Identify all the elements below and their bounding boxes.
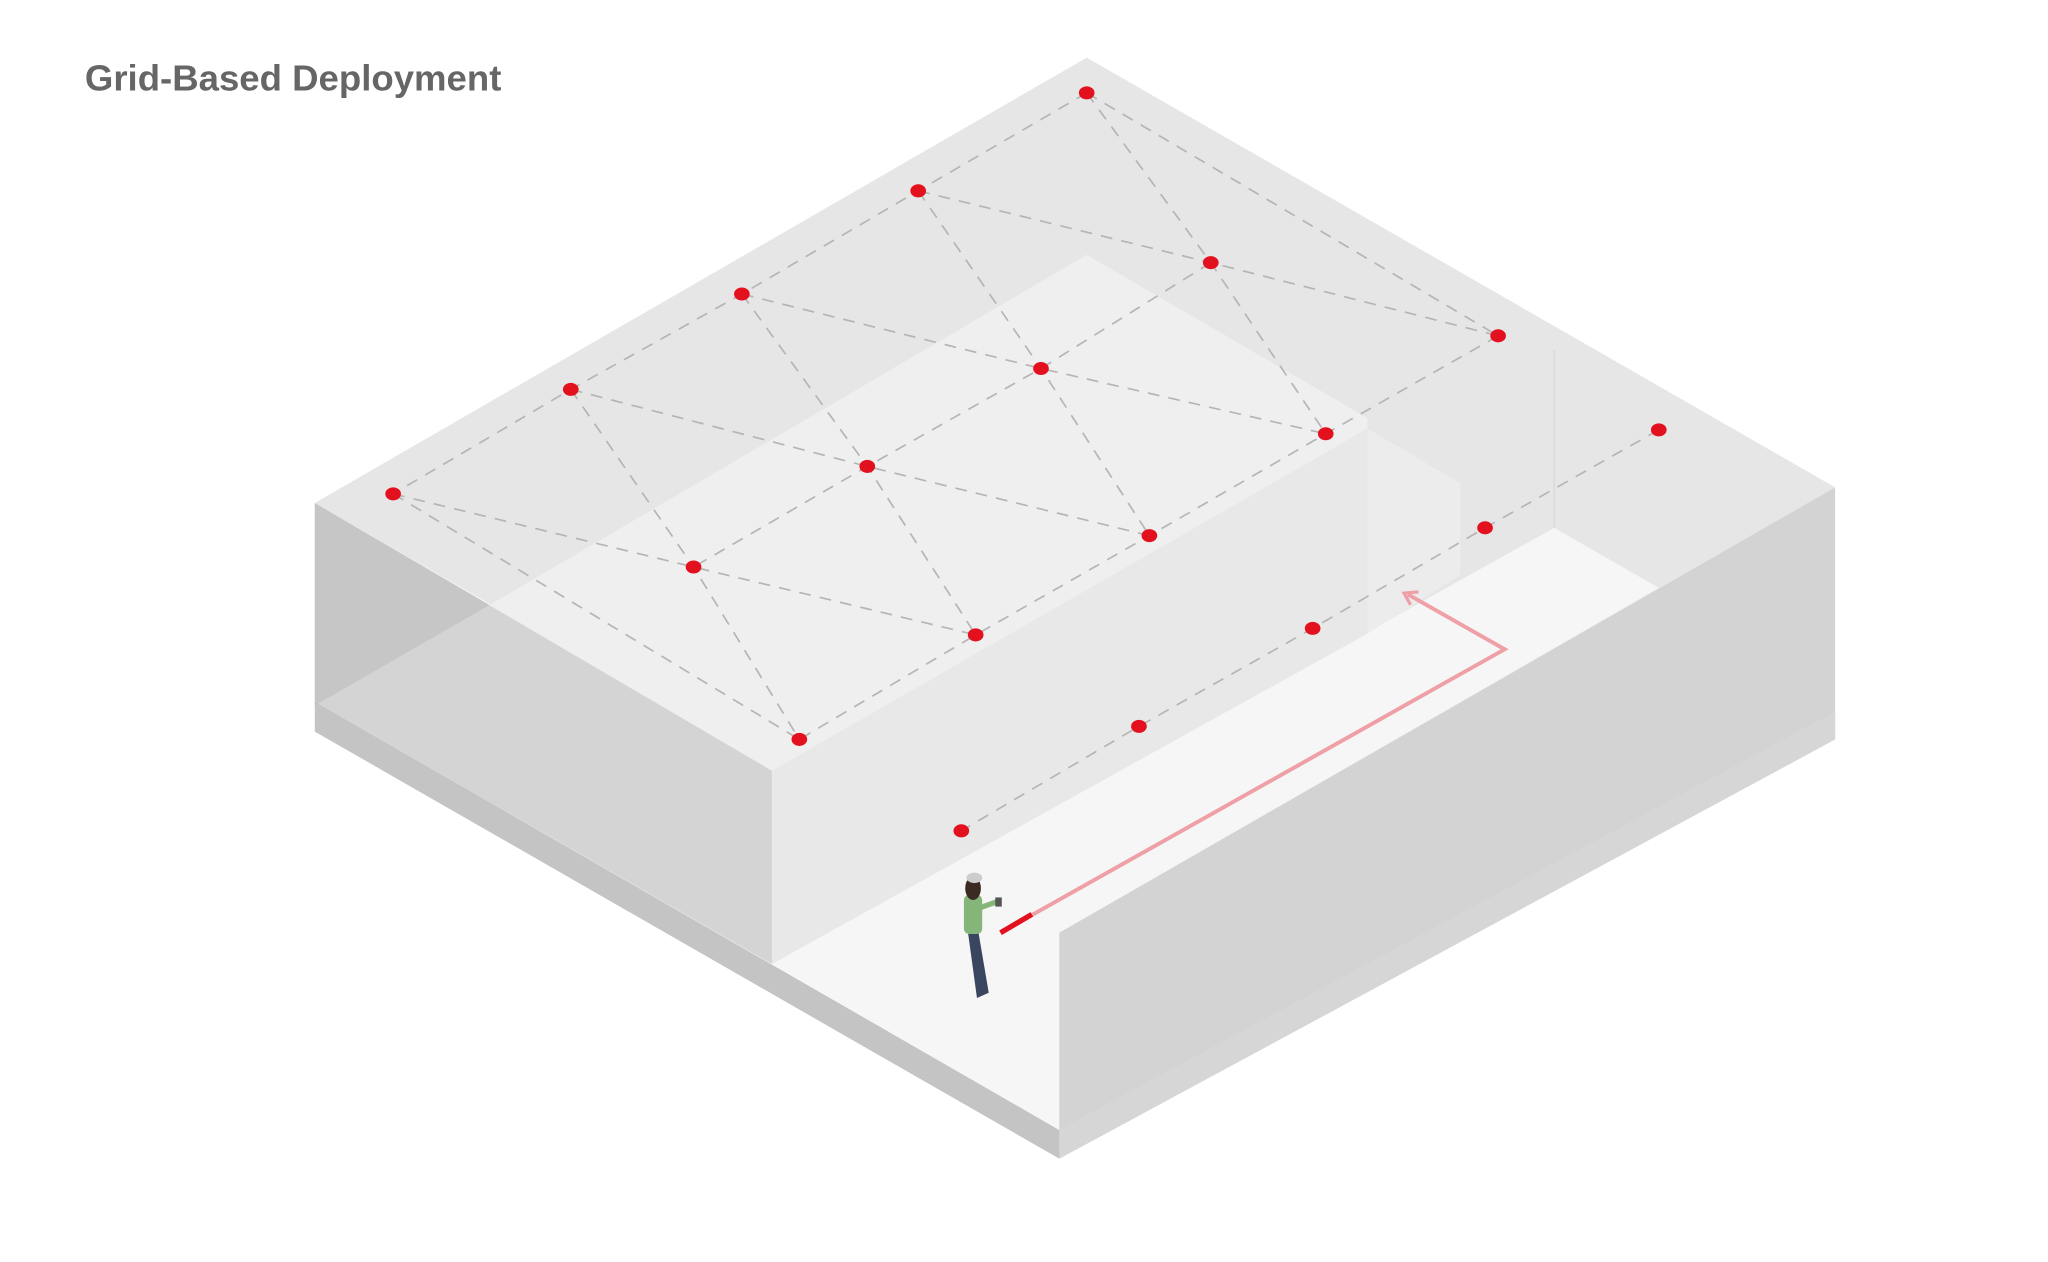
title: Grid-Based Deployment	[85, 57, 501, 98]
building	[315, 58, 1835, 1159]
walking path	[1000, 592, 1505, 933]
slab base	[315, 702, 1835, 1159]
inner wall	[772, 429, 1368, 964]
sensors	[385, 86, 1667, 837]
dashed network	[393, 93, 1659, 831]
top face	[315, 58, 1835, 933]
right outer face	[1059, 487, 1835, 1130]
inner floor	[490, 255, 1368, 964]
left outer face	[315, 503, 772, 964]
person	[964, 873, 1002, 998]
